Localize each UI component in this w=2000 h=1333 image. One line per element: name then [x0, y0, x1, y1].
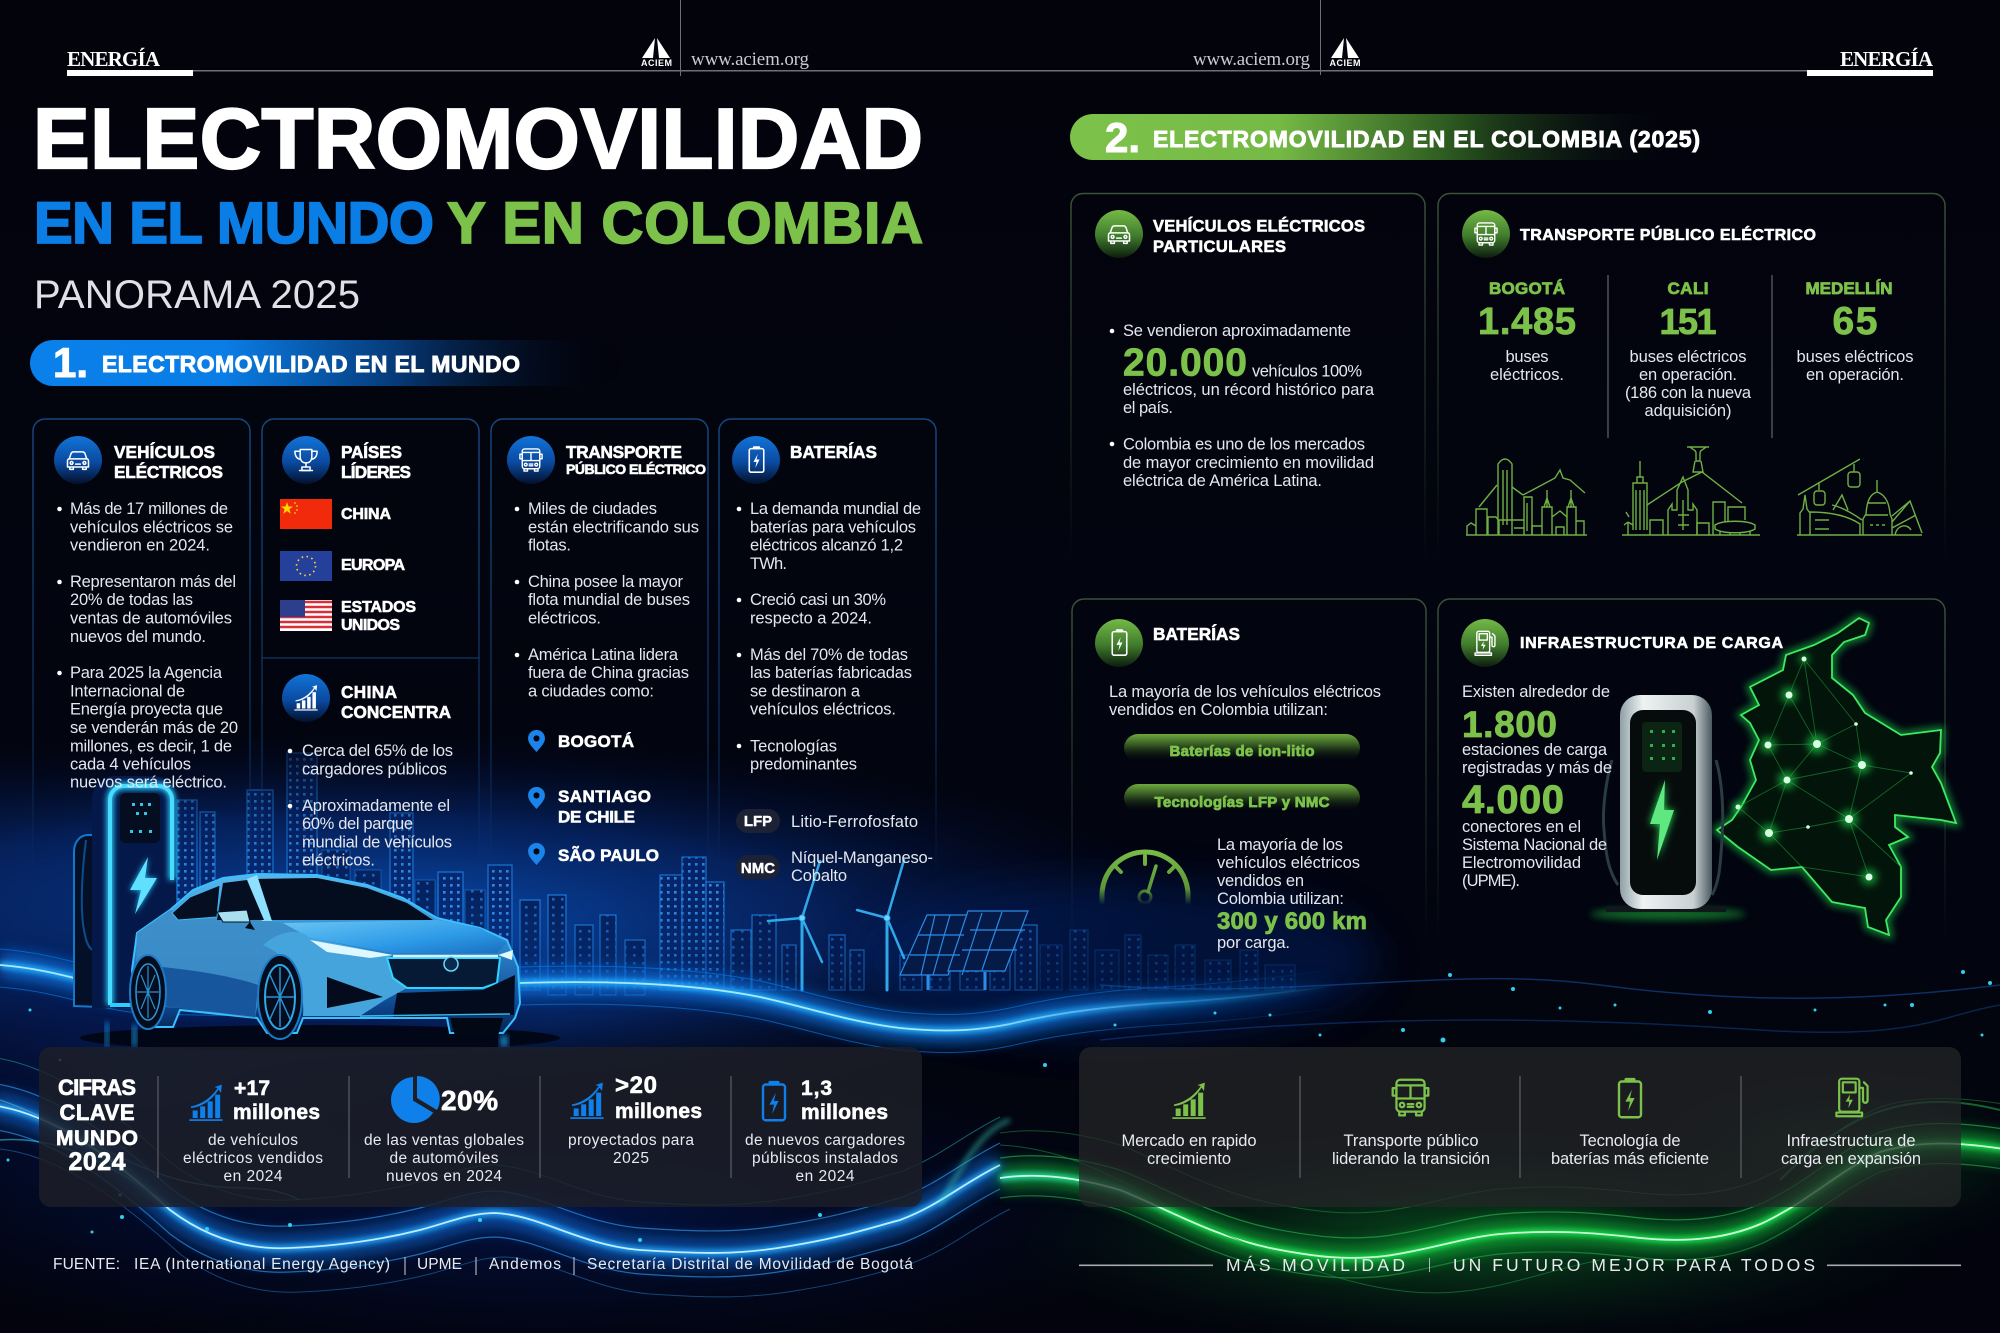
- website left: www.aciem.org: [691, 49, 810, 70]
- label: China: CHINA: [341, 506, 391, 523]
- label: Estados Unidos: [341, 599, 416, 634]
- panel: países líderes: [262, 419, 479, 658]
- stat: +17 millones: [183, 1077, 323, 1185]
- body: eléctricos, un récord histórico para: [1123, 381, 1375, 399]
- bullets: China concentra: Aproximadamente el: [302, 797, 450, 815]
- bullets: se venderán más de 20: [70, 719, 238, 737]
- column: Cali: adquisición): [1644, 402, 1732, 420]
- stat: +17 millones: +17: [234, 1077, 270, 1100]
- panel: baterías Colombia: [1072, 599, 1426, 952]
- icon: skyline Bogotá: [1466, 459, 1587, 535]
- section heading 2: 2.: [1105, 114, 1140, 161]
- item: infraestructura: carga en expansión: [1781, 1150, 1921, 1168]
- bullets: respecto a 2024.: [750, 610, 872, 628]
- intro text: La mayoría de los vehículos eléctricos: [1109, 683, 1381, 701]
- heading: [1153, 216, 1365, 256]
- range text: La mayoría de los: [1217, 836, 1343, 854]
- flag: Europa: [280, 551, 332, 581]
- city: Bogotá: [528, 730, 634, 752]
- column: Cali: 151: [1660, 301, 1716, 342]
- item: transporte: Transporte público: [1344, 1132, 1478, 1150]
- bullets: 20% de todas las: [70, 591, 193, 609]
- city: Santiago de Chile: DE CHILE: [558, 808, 635, 827]
- body: el país.: [1123, 399, 1173, 417]
- bullets: cada 4 vehículos: [70, 756, 191, 774]
- stat: 1,3 millones: públiscos instalados: [752, 1150, 898, 1167]
- icon: battery: [732, 436, 780, 484]
- bullets: están electrificando sus: [528, 518, 699, 536]
- range text: [1217, 836, 1367, 952]
- bullets: China concentra: 60% del parque: [302, 815, 413, 833]
- stat: +17 millones: eléctricos vendidos: [183, 1150, 323, 1167]
- ACIEM logo right: ACIEM: [1330, 58, 1360, 68]
- section heading 1: 1.: [53, 339, 88, 386]
- title: [33, 92, 923, 317]
- bullets: Tecnologías: [750, 737, 837, 755]
- bullets: China concentra: mundial de vehículos: [302, 833, 452, 851]
- bullets: baterías para vehículos: [750, 518, 916, 536]
- pill: ion-litio: Baterías de ion-litio: [1170, 743, 1314, 760]
- body text: estaciones de carga: [1462, 741, 1608, 759]
- source line: UPME: [417, 1256, 462, 1273]
- flag: Estados Unidos: [280, 600, 332, 631]
- stat: >20 millones: millones: [615, 1100, 702, 1123]
- body text: conectores en el: [1462, 818, 1581, 836]
- bullets: Más de 17 millones de: [70, 500, 228, 518]
- section heading 1: [30, 339, 620, 386]
- windows: [253, 878, 433, 920]
- bullets: Internacional de: [70, 682, 185, 700]
- ACIEM logo left: [641, 38, 672, 68]
- grille: [387, 958, 500, 988]
- bullets: [737, 500, 921, 774]
- particles: [6, 970, 1992, 1242]
- stat: >20 millones: 2025: [613, 1150, 649, 1167]
- badge: NMC: Níquel-Manganeso-: [791, 849, 933, 867]
- body: eléctrica de América Latina.: [1123, 472, 1322, 490]
- intro text: [1109, 683, 1381, 719]
- column: Medellín: 65: [1832, 300, 1878, 343]
- icon: wind turbines: [768, 860, 904, 990]
- panel: infraestructura de carga: [1438, 599, 1956, 950]
- item: transporte: [1332, 1080, 1490, 1168]
- column: Medellín: buses eléctricos: [1796, 348, 1914, 366]
- panorama: PANORAMA 2025: [34, 273, 360, 317]
- heading: [566, 442, 706, 477]
- bullets: a ciudades como:: [528, 682, 654, 700]
- bullets: China concentra: Cerca del 65% de los: [302, 742, 453, 760]
- bullets: Para 2025 la Agencia: [70, 664, 223, 682]
- bullets: flotas.: [528, 537, 571, 555]
- bullets: ventas de automóviles: [70, 610, 232, 628]
- body: vehículos 100%: [1252, 362, 1362, 380]
- bullets: TWh.: [750, 555, 787, 573]
- city: São Paulo: SÃO PAULO: [558, 845, 659, 865]
- source line: IEA (International Energy Agency): [134, 1256, 390, 1273]
- section heading 2: [1070, 114, 1700, 161]
- body: de mayor crecimiento en movilidad: [1123, 454, 1374, 472]
- range text: Colombia utilizan:: [1217, 890, 1344, 908]
- range text: vendidos en: [1217, 872, 1304, 890]
- header right: [1193, 0, 1934, 76]
- column: Bogotá: buses: [1506, 348, 1548, 366]
- icon: skyline Medellín: [1797, 459, 1922, 535]
- pill: ion-litio: [1124, 734, 1360, 762]
- stat: 20%: nuevos en 2024: [386, 1168, 502, 1185]
- body: Colombia es uno de los mercados: [1123, 436, 1365, 454]
- heading: INFRAESTRUCTURA DE CARGA: [1520, 635, 1783, 652]
- body text: registradas y más de: [1462, 759, 1612, 777]
- stat: 1,3 millones: de nuevos cargadores: [745, 1132, 905, 1149]
- stat title: MUNDO: [56, 1127, 138, 1150]
- map: Colombia network: [1717, 618, 1956, 935]
- body text: [1462, 683, 1612, 890]
- heading: TRANSPORTE PÚBLICO ELÉCTRICO: [1520, 225, 1816, 244]
- source line: Secretaría Distrital de Movilidad de Bogotá: [587, 1256, 913, 1273]
- bullets: vehículos eléctricos se: [70, 518, 233, 536]
- panel: transporte público eléctrico mundo: [491, 419, 708, 880]
- heading: PÚBLICO ELÉCTRICO: [566, 460, 706, 477]
- panel: vehículos eléctricos particulares: [1071, 194, 1425, 570]
- bullets: flota mundial de buses: [528, 591, 690, 609]
- stat title: CLAVE: [60, 1100, 134, 1125]
- bullets: vendieron en 2024.: [70, 537, 210, 555]
- stat: 20%: [364, 1076, 524, 1185]
- bullets: predominantes: [750, 756, 857, 774]
- column: Bogotá: [1478, 279, 1576, 384]
- tagline: MÁS MOVILIDAD: [1226, 1255, 1405, 1275]
- bullets: [57, 500, 238, 774]
- section heading 2: ELECTROMOVILIDAD EN EL COLOMBIA (2025): [1153, 126, 1700, 152]
- heading: ELÉCTRICOS: [114, 462, 223, 482]
- heading: PARTICULARES: [1153, 238, 1286, 256]
- icon: battery: [1095, 619, 1143, 667]
- stat: +17 millones: de vehículos: [208, 1132, 298, 1149]
- bullets: eléctricos.: [528, 610, 601, 628]
- bullets: América Latina lidera: [528, 646, 679, 664]
- stat title: CIFRAS: [58, 1075, 136, 1100]
- source line: FUENTE:: [53, 1256, 120, 1273]
- subtitle: EN EL MUNDO: [34, 191, 434, 256]
- heading: BATERÍAS: [790, 442, 877, 462]
- label: Energía right: ENERGÍA: [1840, 47, 1934, 71]
- item: infraestructura: Infraestructura de: [1786, 1132, 1916, 1150]
- stats bar: cifras clave mundo: [39, 1047, 922, 1207]
- range text: por carga.: [1217, 934, 1290, 952]
- pill: LFP NMC: Tecnologías LFP y NMC: [1154, 794, 1330, 811]
- column: Medellín: en operación.: [1806, 366, 1904, 384]
- flag: China: [280, 499, 332, 529]
- website right: www.aciem.org: [1193, 49, 1310, 70]
- icon: chart: [282, 674, 330, 722]
- source line: Andemos: [489, 1256, 561, 1273]
- badge: NMC: [736, 849, 933, 885]
- icon: gauge: [1102, 852, 1188, 905]
- item: mercado: crecimiento: [1147, 1150, 1231, 1168]
- bullets: Miles de ciudades: [528, 500, 657, 518]
- bullets: Creció casi un 30%: [750, 591, 886, 609]
- icon: bus: [1462, 210, 1510, 258]
- bullets: China concentra: cargadores públicos: [302, 760, 447, 778]
- column: Cali: buses eléctricos: [1630, 348, 1746, 366]
- stat: 20%: 20%: [441, 1085, 498, 1116]
- range text: vehículos eléctricos: [1217, 854, 1360, 872]
- stats bar: Colombia: [1079, 1047, 1961, 1207]
- section heading 1: ELECTROMOVILIDAD EN EL MUNDO: [102, 351, 520, 377]
- stat: 20%: de las ventas globales: [364, 1132, 524, 1149]
- hood: [283, 920, 507, 953]
- panel: China concentra: [262, 658, 479, 880]
- icon: charger: [1590, 695, 1746, 920]
- item: mercado: [1122, 1083, 1256, 1168]
- heading: BATERÍAS: [1153, 624, 1240, 644]
- title: Y EN COLOMBIA: [447, 191, 923, 256]
- icon: skyline Cali: [1622, 447, 1760, 535]
- bullets: Representaron más del: [70, 573, 236, 591]
- stat: 1,3 millones: 1,3: [801, 1077, 832, 1100]
- heading: [341, 442, 411, 482]
- city: Santiago de Chile: [528, 787, 651, 827]
- car: [80, 874, 560, 1051]
- item: baterías: Tecnología de: [1580, 1132, 1680, 1150]
- item: mercado: Mercado en rapido: [1122, 1132, 1256, 1150]
- body text: Electromovilidad: [1462, 854, 1581, 872]
- text over scene: panel 1 last line: nuevos será eléctrico.: [70, 774, 227, 792]
- heading: CHINA: [341, 682, 397, 702]
- stat: 1,3 millones: en 2024: [796, 1168, 855, 1185]
- stat: >20 millones: proyectados para: [568, 1132, 694, 1149]
- source line: [53, 1256, 913, 1275]
- heading: VEHÍCULOS: [114, 442, 215, 462]
- bullets: las baterías fabricadas: [750, 664, 912, 682]
- column: Medellín: MEDELLÍN: [1806, 279, 1892, 298]
- label: Energía left: ENERGÍA: [67, 47, 161, 71]
- item: baterías: [1551, 1078, 1709, 1168]
- stat title: [56, 1075, 138, 1176]
- column: Cali: [1625, 279, 1752, 420]
- stat: +17 millones: millones: [233, 1101, 320, 1124]
- bullets: fuera de China gracias: [528, 664, 689, 682]
- stat: 1,3 millones: [745, 1077, 905, 1185]
- bullets: nuevos del mundo.: [70, 628, 206, 646]
- column: Cali: CALI: [1668, 279, 1708, 298]
- badge: LFP: [736, 809, 918, 833]
- column: Bogotá: 1.485: [1478, 301, 1576, 343]
- bullets: China concentra: eléctricos.: [302, 852, 375, 870]
- label: Estados Unidos: UNIDOS: [341, 617, 400, 634]
- range text: 300 y 600 km: [1217, 908, 1367, 935]
- badge: NMC: Cobalto: [791, 867, 847, 885]
- badge: NMC: NMC: [741, 860, 775, 877]
- body text: 1.800: [1462, 704, 1557, 745]
- item: transporte: liderando la transición: [1332, 1150, 1490, 1168]
- column: Medellín: [1796, 279, 1914, 384]
- skyline: city: [177, 753, 1295, 1003]
- heading: CONCENTRA: [341, 702, 451, 722]
- bullets: China concentra: [288, 742, 453, 870]
- body text: Sistema Nacional de: [1462, 836, 1607, 854]
- intro text: vendidos en Colombia utilizan:: [1109, 701, 1328, 719]
- body text: (UPME).: [1462, 872, 1520, 890]
- item: baterías: baterías más eficiente: [1551, 1150, 1709, 1168]
- icon: trophy: [282, 436, 330, 484]
- column: Cali: (186 con la nueva: [1625, 384, 1752, 402]
- icon: bus: [507, 436, 555, 484]
- green waves: [1000, 1098, 2000, 1293]
- stat: >20 millones: [568, 1072, 702, 1167]
- bullets: se destinaron a: [750, 682, 861, 700]
- city: São Paulo: [528, 843, 659, 865]
- body text: 4.000: [1462, 778, 1564, 822]
- body: [1110, 322, 1375, 490]
- heading: [114, 442, 223, 482]
- panel: vehículos eléctricos: [33, 419, 250, 880]
- item: infraestructura: [1781, 1079, 1921, 1168]
- icon: car: [54, 436, 102, 484]
- city: Bogotá: BOGOTÁ: [558, 732, 634, 751]
- label: Europa: EUROPA: [341, 557, 405, 574]
- stat: 20%: de automóviles: [390, 1150, 499, 1167]
- column: Bogotá: BOGOTÁ: [1489, 279, 1565, 298]
- heading: TRANSPORTE: [566, 442, 682, 462]
- charger left: [74, 776, 176, 1008]
- panel: baterías mundo: [719, 419, 936, 885]
- stat title: 2024: [68, 1148, 126, 1176]
- body: Se vendieron aproximadamente: [1123, 322, 1351, 340]
- heading: VEHÍCULOS ELÉCTRICOS: [1153, 216, 1365, 236]
- icon: car: [1095, 210, 1143, 258]
- tagline: UN FUTURO MEJOR PARA TODOS: [1453, 1255, 1815, 1275]
- heading: [341, 682, 451, 722]
- icon: charging: [1461, 619, 1509, 667]
- heading: PAÍSES: [341, 442, 402, 462]
- heading: LÍDERES: [341, 462, 411, 482]
- stat: +17 millones: en 2024: [224, 1168, 283, 1185]
- label: Estados Unidos: ESTADOS: [341, 599, 416, 616]
- bullets: vehículos eléctricos.: [750, 701, 896, 719]
- ACIEM logo right: [1330, 38, 1360, 68]
- bullets: [515, 500, 699, 700]
- car reflections: [105, 1022, 508, 1047]
- city: Santiago de Chile: SANTIAGO: [558, 787, 651, 806]
- panel: transporte público eléctrico: [1438, 194, 1945, 570]
- bullets: China posee la mayor: [528, 573, 684, 591]
- blue waves: [0, 949, 2000, 1297]
- bullets: eléctricos alcanzó 1,2: [750, 537, 903, 555]
- header left: [67, 0, 1807, 76]
- stat: 1,3 millones: millones: [801, 1101, 888, 1124]
- ACIEM logo left: ACIEM: [641, 58, 672, 68]
- stat: >20 millones: >20: [615, 1072, 657, 1099]
- bullets: La demanda mundial de: [750, 500, 921, 518]
- wheels: [130, 955, 166, 1029]
- badge: LFP: Litio-Ferrofosfato: [791, 813, 918, 831]
- bullets: millones, es decir, 1 de: [70, 737, 232, 755]
- icon: solar panels: [900, 911, 1028, 990]
- bullets: Más del 70% de todas: [750, 646, 908, 664]
- tagline: [1079, 1255, 1961, 1275]
- body text: Existen alrededor de: [1462, 683, 1610, 701]
- badge: LFP: LFP: [744, 813, 772, 830]
- number: 20.000: [1123, 342, 1247, 384]
- title: ELECTROMOVILIDAD: [33, 92, 923, 187]
- bullets: Energía proyecta que: [70, 701, 223, 719]
- column: Cali: en operación.: [1639, 366, 1737, 384]
- pill: LFP NMC: [1124, 784, 1360, 812]
- column: Bogotá: eléctricos.: [1490, 366, 1564, 384]
